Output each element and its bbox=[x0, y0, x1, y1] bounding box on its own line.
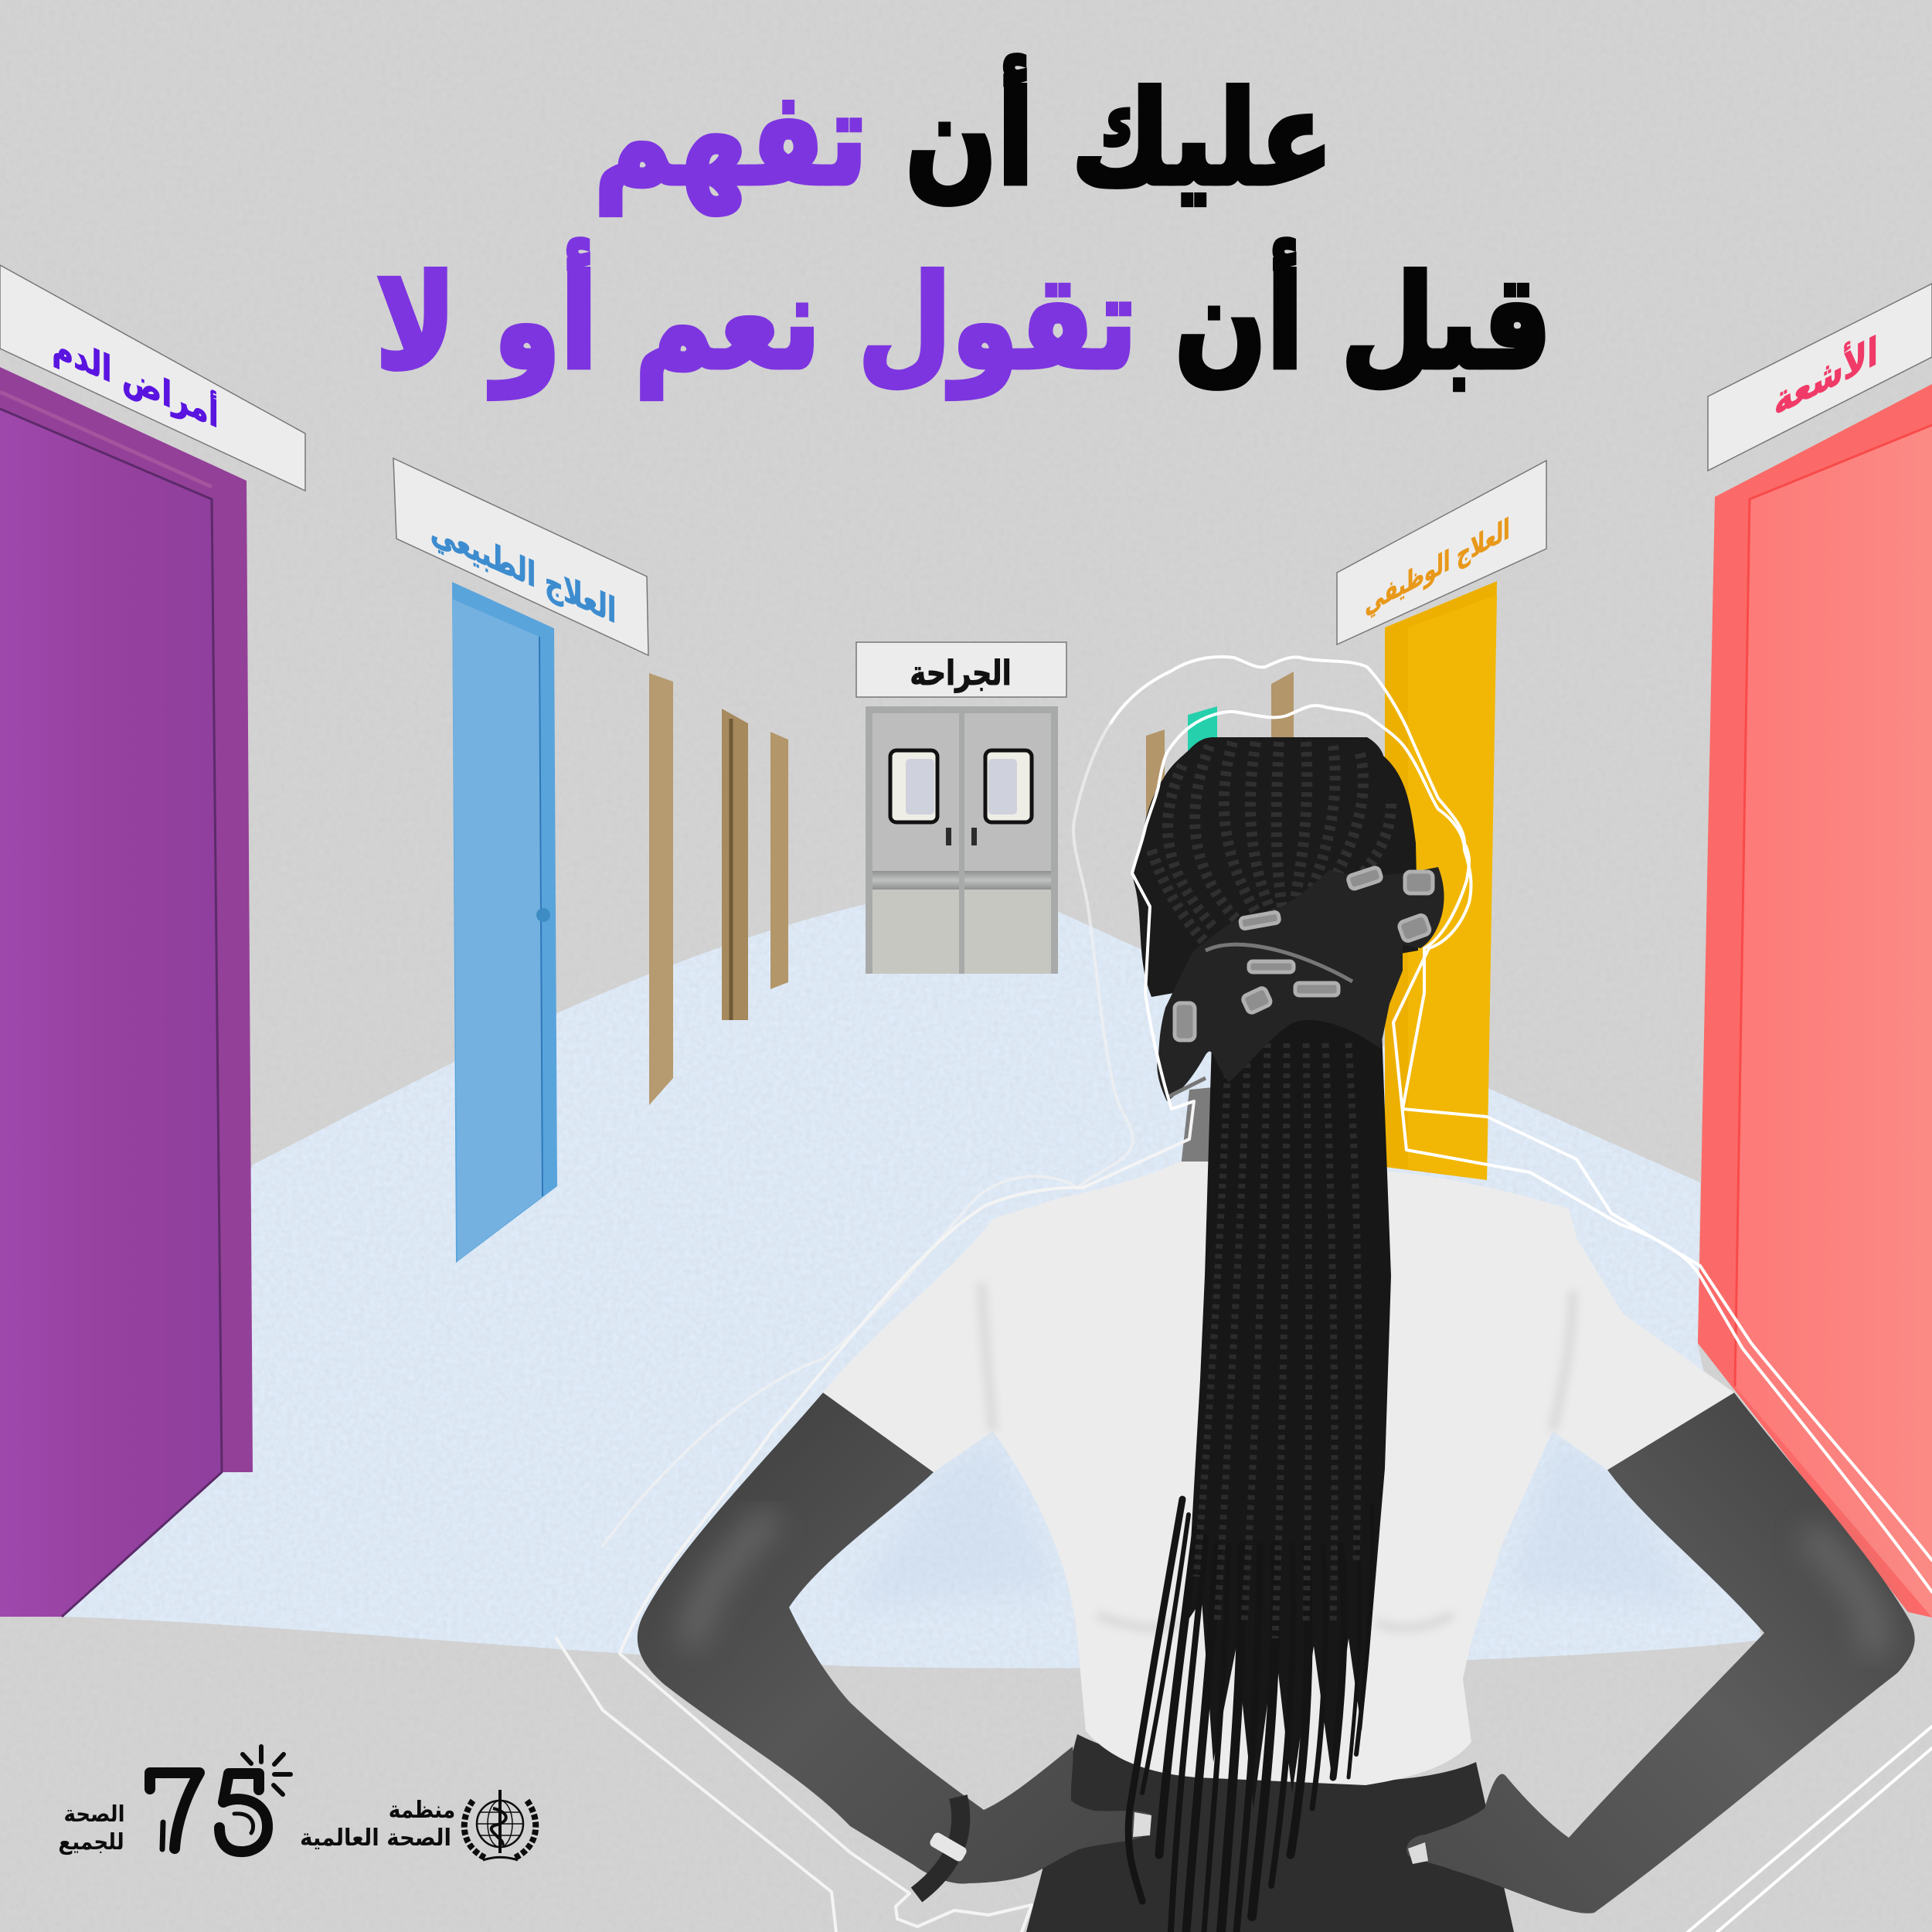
sign: blood diseases: أمراض الدم bbox=[52, 321, 219, 437]
title: عليك أن تفهم bbox=[594, 55, 1333, 215]
outline: right lower arm, second line bbox=[1717, 1748, 1932, 1932]
sign: occupational therapy: العلاج الوظيفي bbox=[1365, 512, 1510, 621]
door: red bbox=[1698, 384, 1932, 1617]
sign: surgery: الجراحة bbox=[910, 654, 1012, 693]
door: yellow bbox=[1385, 581, 1497, 1180]
text: health for all: الصحة bbox=[63, 1801, 125, 1827]
sign: physiotherapy bbox=[393, 458, 648, 655]
outline: left lower arm, second line bbox=[556, 1638, 836, 1932]
number: 75 with sun rays bbox=[150, 1747, 291, 1852]
hair tail bbox=[1128, 989, 1391, 1932]
sign: physiotherapy: العلاج الطبيعي bbox=[430, 509, 616, 631]
text: health for all: للجميع bbox=[58, 1828, 124, 1855]
sign: blood diseases bbox=[0, 265, 305, 491]
text: WHO name: منظمة bbox=[389, 1796, 455, 1823]
neck bbox=[1181, 1082, 1267, 1167]
arm: left bbox=[638, 1393, 1151, 1884]
logo: 75 years of health for all bbox=[58, 1747, 536, 1860]
hair on head bbox=[1133, 737, 1418, 997]
outline: right lower arm, first line bbox=[1688, 1726, 1932, 1932]
outline: bright inner bbox=[1132, 706, 1932, 1592]
outline: bright outer bbox=[1111, 657, 1932, 1560]
watch strap bbox=[917, 1797, 961, 1895]
fingernails bbox=[1133, 1812, 1428, 1864]
figure: woman seen from behind bbox=[638, 737, 1915, 1932]
door: surgery double door bbox=[866, 706, 1058, 974]
title bbox=[376, 55, 1552, 399]
corridor doors: brown, left bbox=[649, 673, 788, 1105]
door: purple bbox=[0, 367, 253, 1617]
outline: left lower arm with hand squiggle bbox=[620, 1101, 1194, 1932]
sign: radiology: الأشعة bbox=[1774, 326, 1878, 426]
text: WHO name: الصحة العالمية bbox=[300, 1824, 451, 1851]
head scarf bbox=[1157, 866, 1444, 1101]
corridor doors: right, behind the head bbox=[1146, 672, 1294, 819]
text: WHO name bbox=[300, 1796, 455, 1851]
text: health for all bbox=[58, 1801, 125, 1855]
title: قبل أن تقول نعم أو لا bbox=[376, 239, 1552, 399]
outline: faint left contour bbox=[603, 723, 1133, 1546]
jeans bbox=[1026, 1734, 1514, 1932]
door: blue bbox=[452, 582, 557, 1263]
sign: surgery bbox=[856, 642, 1066, 697]
floor bbox=[64, 904, 1762, 1668]
floor shadow near the figure bbox=[850, 1437, 1700, 1607]
t-shirt bbox=[823, 1162, 1734, 1785]
icon: WHO emblem bbox=[464, 1790, 536, 1860]
arm highlights bbox=[694, 1515, 1874, 1654]
sign: occupational therapy bbox=[1337, 461, 1546, 645]
sign: radiology bbox=[1708, 284, 1932, 471]
figure outlines: white contours bbox=[556, 657, 1932, 1932]
arm: right bbox=[1406, 1393, 1915, 1913]
t-shirt folds bbox=[981, 1283, 1573, 1628]
